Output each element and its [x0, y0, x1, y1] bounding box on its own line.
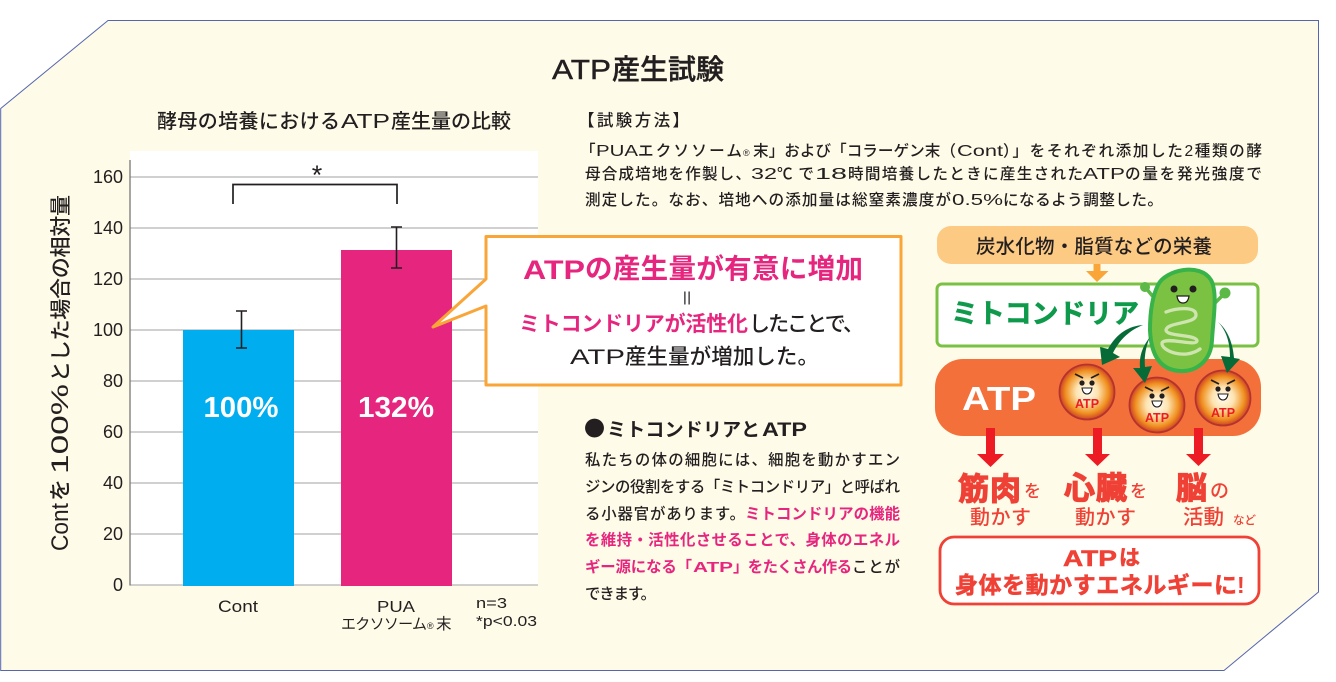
text block: test method: ®	[743, 148, 750, 158]
text block: test method: ）」をそれぞれ添加した2種類の酵	[1003, 142, 1262, 160]
ATP characters	[1060, 364, 1250, 432]
text block: test method: 時間培養したときに産生された	[848, 165, 1083, 183]
text block: test method: 測定した。なお、培地への添加量は総窒素濃度が	[585, 190, 951, 209]
text block: mitochondria and ATP: ギー源になる「	[585, 558, 692, 576]
title: ATP	[552, 54, 611, 85]
text block: test method: ℃で	[777, 166, 814, 183]
nutrients box: 炭水化物・脂質などの栄養	[976, 236, 1212, 258]
y axis labels: 0	[113, 575, 123, 595]
sample note: n=3	[476, 595, 507, 612]
chart heading: ATP	[341, 111, 390, 133]
label: brain: 脳	[1176, 471, 1207, 506]
y axis labels: 20	[103, 524, 123, 544]
text block: mitochondria and ATP: ATP	[762, 420, 807, 441]
x axis labels: エクソソーム	[341, 616, 427, 633]
y axis labels: 60	[103, 422, 123, 442]
significance bracket: *	[312, 160, 323, 190]
text block: mitochondria and ATP: 私たちの体の細胞には、細胞を動かすエン	[585, 451, 900, 469]
ATP characters: ATP	[1211, 406, 1235, 420]
label: muscle: 筋肉	[958, 472, 1021, 507]
bar: Cont 100%	[183, 330, 294, 586]
text block: mitochondria and ATP: 」をたくさん作る	[733, 558, 852, 576]
sample note: *p<0.03	[476, 613, 537, 630]
title: 産生試験	[612, 54, 724, 85]
arrows: ATP to organs	[977, 428, 1211, 467]
x axis labels: 末	[436, 615, 452, 633]
chart heading	[157, 110, 511, 133]
x axis labels: Cont	[218, 598, 258, 616]
text block: test method: 【試験方法】	[578, 111, 689, 130]
text block: test method: 「	[580, 142, 596, 160]
y axis labels: 100	[93, 320, 123, 340]
label: brain: など	[1233, 514, 1256, 527]
chart heading: 酵母の培養における	[157, 110, 340, 133]
text block: mitochondria and ATP: る小器官があります。	[585, 504, 745, 523]
label: heart	[1064, 471, 1147, 529]
energy box: ATP	[1063, 546, 1117, 571]
y axis labels: 80	[103, 371, 123, 391]
callout: ＝	[676, 289, 696, 307]
y axis labels: 40	[103, 473, 123, 493]
callout: ATP	[570, 346, 625, 369]
ATP band: ATP	[962, 380, 1036, 417]
sample note	[476, 595, 537, 630]
y axis labels: 120	[93, 269, 123, 289]
text block: mitochondria and ATP: ジンの役割をする「ミトコンドリア」と呼ばれ	[585, 478, 900, 496]
text block: test method: Cont	[957, 143, 1004, 160]
energy box	[940, 537, 1259, 604]
callout: 産生量が増加した。	[625, 345, 819, 369]
text block: test method: になるよう調整した。	[1003, 191, 1163, 209]
arrow: nutrients to mitochondria	[1086, 264, 1108, 282]
text block: test method: の量を発光強度で	[1125, 165, 1262, 183]
arrows: mitochondria to ATP	[1100, 322, 1240, 383]
bar: PUA 132%	[341, 250, 452, 586]
y axis title	[47, 195, 74, 551]
callout	[433, 236, 901, 385]
text block: mitochondria and ATP: ことが	[852, 557, 901, 576]
y axis title: を	[48, 479, 73, 501]
icon: mitochondria character	[1140, 270, 1230, 371]
error bars	[236, 227, 402, 348]
ATP characters: ATP	[1075, 397, 1099, 411]
label: brain	[1176, 471, 1256, 529]
label: muscle: 動かす	[970, 506, 1031, 529]
energy box: 身体を動かすエネルギーに	[955, 572, 1237, 598]
text block: mitochondria and ATP: ミトコンドリアと	[607, 420, 760, 441]
plot background	[130, 151, 538, 585]
text block: test method: 32	[751, 166, 777, 183]
text block: mitochondria and ATP: ATP	[693, 559, 733, 576]
mitochondria box	[937, 284, 1258, 346]
text block: test method: エクソソーム	[638, 142, 742, 160]
y axis title: とした場合の相対量	[50, 195, 73, 382]
y axis labels: 160	[93, 167, 123, 187]
text block: mitochondria and ATP: できます。	[585, 585, 656, 603]
x axis labels: ®	[427, 621, 434, 631]
text block: mitochondria and ATP: ミトコンドリアの機能	[745, 504, 901, 523]
label: heart: を	[1130, 482, 1147, 501]
label: heart: 心臓	[1064, 471, 1127, 506]
ATP band	[935, 359, 1261, 436]
text block: test method	[578, 111, 1262, 209]
text block: test method: 母合成培地を作製し、	[585, 165, 751, 183]
y axis labels	[93, 167, 123, 595]
callout: ミトコンドリアが活性化	[519, 312, 748, 336]
chart heading: 産生量の比較	[391, 110, 511, 133]
chart: ATP production comparison	[47, 110, 538, 633]
y axis title: Cont	[47, 503, 74, 551]
ATP characters: ATP	[1145, 411, 1169, 425]
energy box: !	[1237, 572, 1245, 598]
label: muscle	[958, 472, 1041, 529]
label: heart: 動かす	[1075, 506, 1136, 529]
text block: test method: PUA	[596, 143, 639, 160]
callout: ATP	[523, 255, 585, 285]
bar: PUA 132%: 132%	[358, 392, 434, 424]
y axis title: 100%	[47, 384, 74, 474]
text block: test method: 0.5%	[952, 192, 1003, 209]
callout: の産生量が有意に増加	[585, 253, 863, 284]
title	[552, 54, 724, 85]
label: muscle: を	[1024, 482, 1041, 501]
bar: Cont 100%: 100%	[204, 392, 279, 424]
mitochondria box: ミトコンドリア	[951, 299, 1139, 329]
text block: test method: ATP	[1083, 166, 1125, 183]
x axis labels: PUA	[377, 599, 415, 616]
significance bracket	[233, 160, 397, 204]
x axis labels	[218, 598, 452, 633]
nutrients box	[937, 226, 1258, 264]
energy box: は	[1119, 547, 1140, 570]
callout: したことで、	[749, 313, 864, 336]
text block: mitochondria and ATP: ●	[584, 413, 605, 443]
text block: test method: 18	[815, 166, 847, 183]
text block: mitochondria and ATP: を維持・活性化させることで、身体のエネル	[585, 530, 900, 549]
diagram: mitochondria produce ATP	[935, 226, 1261, 604]
label: brain: 活動	[1183, 506, 1224, 529]
text block: mitochondria and ATP	[584, 413, 901, 603]
y axis labels: 140	[93, 218, 123, 238]
label: brain: の	[1210, 481, 1229, 502]
text block: test method: 末」および「コラーゲン末（	[753, 142, 956, 160]
